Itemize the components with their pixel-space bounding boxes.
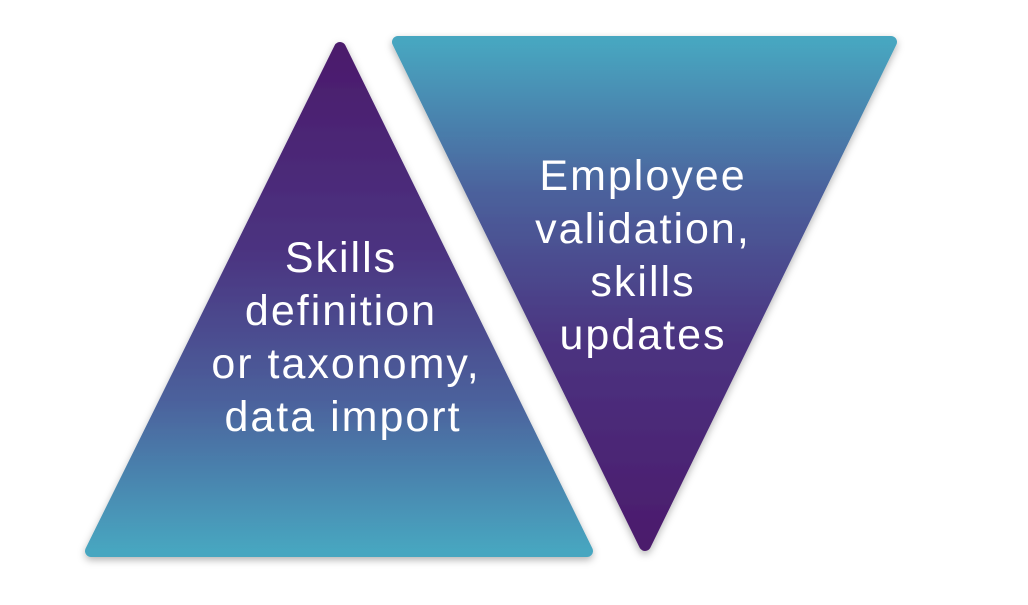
text: skills definition: or taxonomy,: [211, 340, 481, 388]
panel: left upward triangle: [91, 48, 587, 551]
panel: right downward triangle: [398, 42, 891, 545]
text: employee validation: [535, 152, 751, 359]
text: skills definition: data import: [224, 393, 462, 441]
text: employee validation: Employee: [539, 152, 747, 200]
text: skills definition: Skills: [285, 234, 397, 282]
text: employee validation: validation,: [535, 205, 751, 253]
text: skills definition: [211, 234, 481, 441]
text: employee validation: updates: [559, 311, 727, 359]
text: skills definition: definition: [245, 287, 437, 335]
text: employee validation: skills: [590, 258, 696, 306]
